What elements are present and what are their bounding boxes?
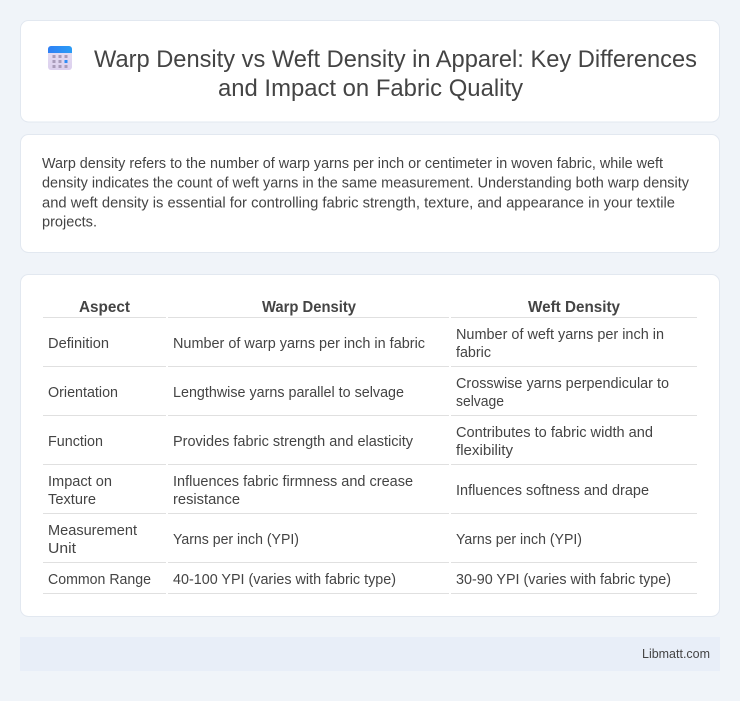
panel: introduction — [20, 134, 720, 252]
title: and Impact on Fabric Quality — [218, 75, 523, 102]
row: common range: 40-100 YPI (varies with fabric type) — [173, 571, 396, 588]
table header row: Warp Density — [262, 299, 356, 316]
row: common range — [43, 571, 697, 594]
row: function: Contributes to fabric width and — [456, 424, 653, 441]
row: function: Function — [48, 433, 103, 450]
panel: comparison table — [20, 274, 720, 616]
title: Warp Density vs Weft Density in Apparel: Key Differences — [94, 46, 697, 73]
row: impact on texture — [43, 473, 697, 514]
footer brand text: Libmatt.com — [642, 646, 710, 661]
row: function: flexibility — [456, 442, 513, 459]
table header row: Aspect — [79, 299, 131, 316]
title — [94, 46, 697, 102]
row: measurement unit — [43, 522, 697, 563]
row: measurement unit: Yarns per inch (YPI) — [456, 531, 582, 548]
row: definition — [43, 326, 697, 367]
intro text block: density indicates the count of weft yarns in the same measurement. Understanding both warp density — [42, 174, 689, 192]
row: measurement unit: Yarns per inch (YPI) — [173, 531, 299, 548]
row: common range: Common Range — [48, 571, 151, 588]
row: measurement unit: Unit — [48, 540, 77, 557]
row: definition: fabric — [456, 344, 491, 361]
intro text block: and weft density is essential for controlling fabric strength, texture, and appearance in your textile — [42, 194, 675, 212]
row: impact on texture: Influences softness and drape — [456, 482, 649, 499]
table header row: Weft Density — [528, 299, 620, 316]
row: definition: Definition — [48, 335, 109, 352]
row: impact on texture: resistance — [173, 491, 240, 508]
row: orientation — [43, 375, 697, 416]
row: orientation: Orientation — [48, 384, 118, 401]
intro text block: Warp density refers to the number of warp yarns per inch or centimeter in woven fabric, while weft — [42, 155, 664, 172]
row: definition: Number of warp yarns per inch in fabric — [173, 335, 425, 352]
panel: title header — [20, 20, 720, 122]
footer bar — [20, 637, 720, 671]
row: measurement unit: Measurement — [48, 522, 138, 539]
row: common range: 30-90 YPI (varies with fabric type) — [456, 571, 671, 588]
row: orientation: Lengthwise yarns parallel to selvage — [173, 384, 404, 401]
row: impact on texture: Influences fabric firmness and crease — [173, 473, 413, 490]
row: orientation: Crosswise yarns perpendicular to — [456, 375, 669, 392]
row: definition: Number of weft yarns per inch in — [456, 326, 664, 343]
intro text block: projects. — [42, 214, 97, 230]
row: impact on texture: Impact on — [48, 473, 112, 490]
intro text block — [42, 155, 689, 230]
row: orientation: selvage — [456, 393, 504, 410]
row: function — [43, 424, 697, 465]
table header row — [43, 299, 697, 318]
row: function: Provides fabric strength and elasticity — [173, 433, 413, 450]
row: impact on texture: Texture — [48, 491, 96, 508]
icon: calendar — [48, 46, 72, 70]
